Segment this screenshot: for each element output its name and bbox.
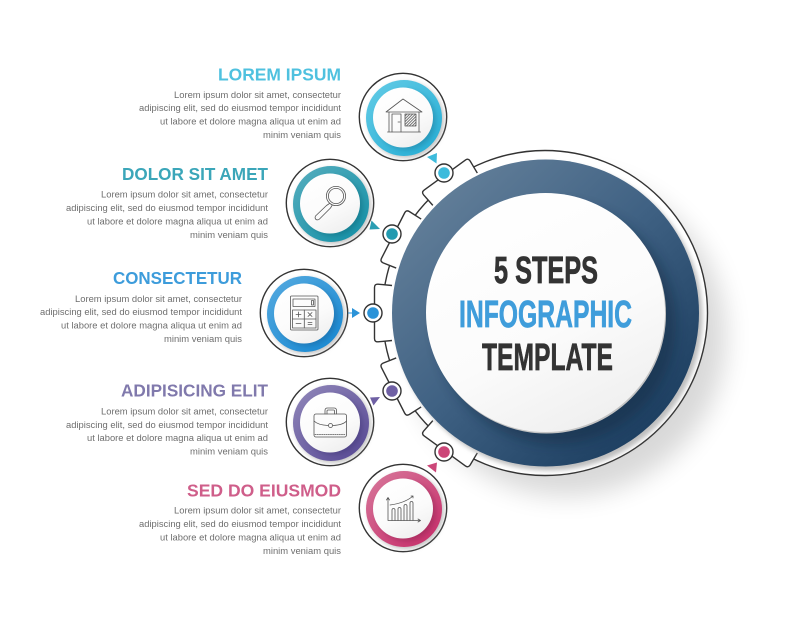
step 5 [139,443,453,557]
tab 5 [421,420,478,468]
step 5 text: minim veniam quis [263,546,341,557]
step 3 arrow [348,308,360,318]
step 3 text: adipiscing elit, sed do eiusmod tempor incididunt [40,307,242,318]
inner disc shadow [436,204,676,444]
icon: calculator [290,296,318,330]
step 4 text: ut labore et dolore magna aliqua ut enim ad [87,433,268,444]
step 5 text: adipiscing elit, sed do eiusmod tempor incididunt [139,519,341,530]
ring shadow crescent [396,164,702,470]
inner disc rim [427,194,666,434]
title: INFOGRAPHIC [459,294,632,336]
step 4 text: minim veniam quis [190,446,268,458]
icon: magnifier [315,186,346,220]
step 2 text: minim veniam quis [190,230,268,241]
step 2 node [383,225,401,243]
tab 4 [380,357,422,416]
step 5 heading: SED DO EIUSMOD [187,480,341,500]
step 3 [40,268,382,357]
step 4 [66,378,401,466]
icon: house [386,99,422,132]
step 1 text: adipiscing elit, sed do eiusmod tempor incididunt [139,103,341,114]
step 4 text [66,406,269,458]
step 5 text: ut labore et dolore magna aliqua ut enim ad [160,532,341,544]
step 3 text [40,294,243,345]
step 2 text: adipiscing elit, sed do eiusmod tempor incididunt [66,203,268,214]
step 1 text: minim veniam quis [263,130,341,141]
step 3 node [364,304,382,322]
step 4 text: Lorem ipsum dolor sit amet, consectetur [101,406,269,418]
main circle soft drop shadow [406,176,726,496]
step 2 text [66,190,269,241]
step 4 badge [286,378,374,466]
step 1 text: ut labore et dolore magna aliqua ut enim ad [160,116,341,128]
outer outline circle [382,150,708,476]
icon: briefcase [314,408,346,437]
step 1 node [435,164,453,182]
dark navy ring [392,160,699,466]
title: 5 STEPS [494,250,598,292]
main circle group [374,150,726,496]
step 5 node [435,443,453,461]
step 3 text: minim veniam quis [164,334,242,345]
title: TEMPLATE [482,337,613,379]
step 4 arrow [370,397,380,406]
step 2 text: Lorem ipsum dolor sit amet, consectetur [101,190,269,200]
step 1 text: Lorem ipsum dolor sit amet, consectetur [174,90,342,101]
step 5 arrow [427,462,437,472]
step 1 text [139,90,342,141]
inner white disc [426,193,665,432]
tab 1 [421,158,478,206]
step 2 arrow [370,220,380,230]
step 4 text: adipiscing elit, sed do eiusmod tempor incididunt [66,420,268,431]
step 2 badge [286,159,374,247]
tab 3 [374,284,392,342]
step 2 text: ut labore et dolore magna aliqua ut enim ad [87,216,268,228]
step 1 arrow [427,153,437,164]
step 2 [66,159,401,247]
step 1 heading: LOREM IPSUM [218,64,341,84]
step 4 node [383,382,401,400]
step 3 heading: CONSECTETUR [113,268,242,288]
tab 2 [380,210,422,269]
step 4 heading: ADIPISICING ELIT [121,380,268,400]
step 3 text: ut labore et dolore magna aliqua ut enim ad [61,320,242,332]
step 2 heading: DOLOR SIT AMET [122,164,268,184]
step 5 badge [359,464,447,552]
step 1 badge [359,73,447,161]
step 3 text: Lorem ipsum dolor sit amet, consectetur [75,294,243,305]
step 5 text [139,506,342,557]
title [459,250,632,379]
step 5 text: Lorem ipsum dolor sit amet, consectetur [174,506,342,516]
step 3 badge [260,269,348,357]
step 1 [139,64,453,182]
icon: bar chart [386,496,420,522]
